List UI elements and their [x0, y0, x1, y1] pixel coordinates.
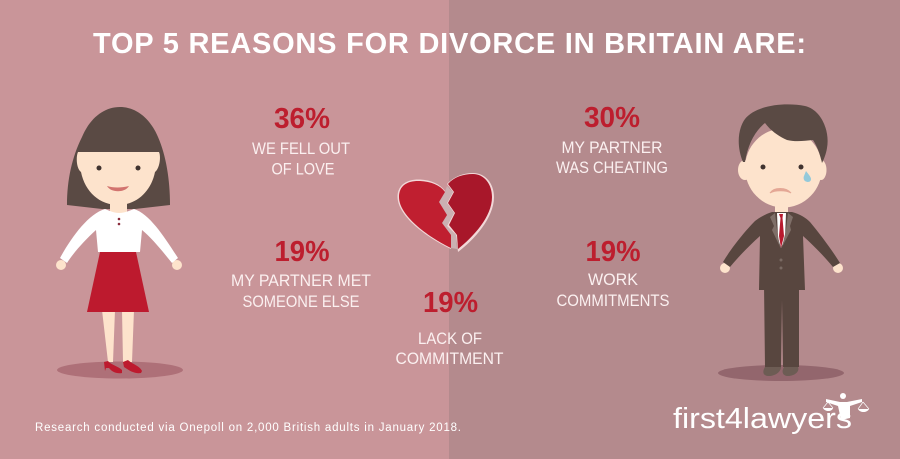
- hair: [739, 104, 828, 163]
- panel: left background: [0, 0, 449, 459]
- shadow: [718, 365, 844, 381]
- panel: right background: [449, 0, 900, 459]
- left half: [399, 181, 451, 248]
- stat: 19% work commitments: COMMITMENTS: [556, 292, 670, 310]
- stat: 36% we fell out of love: OF LOVE: [272, 160, 334, 178]
- fringe: [78, 116, 159, 152]
- face: [77, 152, 160, 205]
- heart outline right: [447, 173, 494, 252]
- stat: 30% my partner was cheating: [556, 102, 668, 177]
- mouth: [770, 188, 791, 193]
- stat: 19% lack of commitment: LACK OF: [418, 330, 482, 348]
- stat: 19% my partner met someone else: SOMEONE ELSE: [242, 293, 360, 311]
- hands: [720, 263, 730, 273]
- logo figure with scales: [823, 393, 869, 420]
- title: TOP 5 REASONS FOR DIVORCE IN BRITAIN ARE:: [93, 28, 806, 60]
- tie: [779, 214, 784, 248]
- blouse buttons: [118, 218, 120, 225]
- legs: [102, 310, 134, 362]
- lapels: [770, 213, 793, 247]
- skirt: [87, 252, 149, 312]
- stat: 36% we fell out of love: 36%: [274, 103, 330, 135]
- illustration: woman: [56, 107, 183, 378]
- neck: [775, 200, 788, 216]
- jacket buttons: [780, 258, 782, 270]
- stat: 36% we fell out of love: WE FELL OUT: [252, 140, 350, 158]
- stat: 19% my partner met someone else: [231, 236, 371, 311]
- stat: 19% my partner met someone else: MY PARTNER MET: [231, 272, 371, 290]
- blouse: [60, 209, 178, 263]
- smile: [107, 186, 129, 191]
- stat: 19% lack of commitment: COMMITMENT: [396, 350, 504, 368]
- stat: 19% lack of commitment: [396, 287, 504, 368]
- hair: [67, 107, 170, 209]
- right half: [448, 174, 492, 249]
- logo wordmark: first4lawyers: [673, 403, 852, 435]
- stat: 30% my partner was cheating: WAS CHEATING: [556, 159, 668, 177]
- stat: 30% my partner was cheating: 30%: [584, 102, 640, 134]
- neck: [110, 198, 127, 214]
- stat: 19% lack of commitment: 19%: [423, 287, 478, 319]
- illustration: man: [718, 104, 844, 381]
- ears: [738, 160, 752, 180]
- face: [745, 128, 822, 208]
- hands: [56, 260, 66, 270]
- shoes: [104, 360, 142, 373]
- stat: 36% we fell out of love: [252, 103, 350, 178]
- stat: 19% work commitments: WORK: [588, 271, 638, 289]
- eyes: [96, 166, 102, 170]
- eyes: [760, 164, 766, 170]
- stat: 30% my partner was cheating: MY PARTNER: [562, 139, 663, 157]
- shirt: [777, 213, 786, 248]
- stat: 19% work commitments: 19%: [586, 236, 641, 268]
- legs: [764, 285, 799, 367]
- logo: first4lawyers: [673, 393, 869, 435]
- tear: [804, 171, 811, 182]
- heart outline left: [397, 179, 451, 249]
- shadow: [57, 362, 183, 378]
- stat: 19% work commitments: [556, 236, 670, 310]
- jacket: [723, 212, 840, 290]
- shoes: [763, 367, 798, 376]
- icon: broken heart: [397, 173, 494, 252]
- crack: [439, 186, 457, 249]
- stat: 19% my partner met someone else: 19%: [274, 236, 330, 268]
- footnote: Research conducted via Onepoll on 2,000 British adults in January 2018.: [35, 422, 461, 434]
